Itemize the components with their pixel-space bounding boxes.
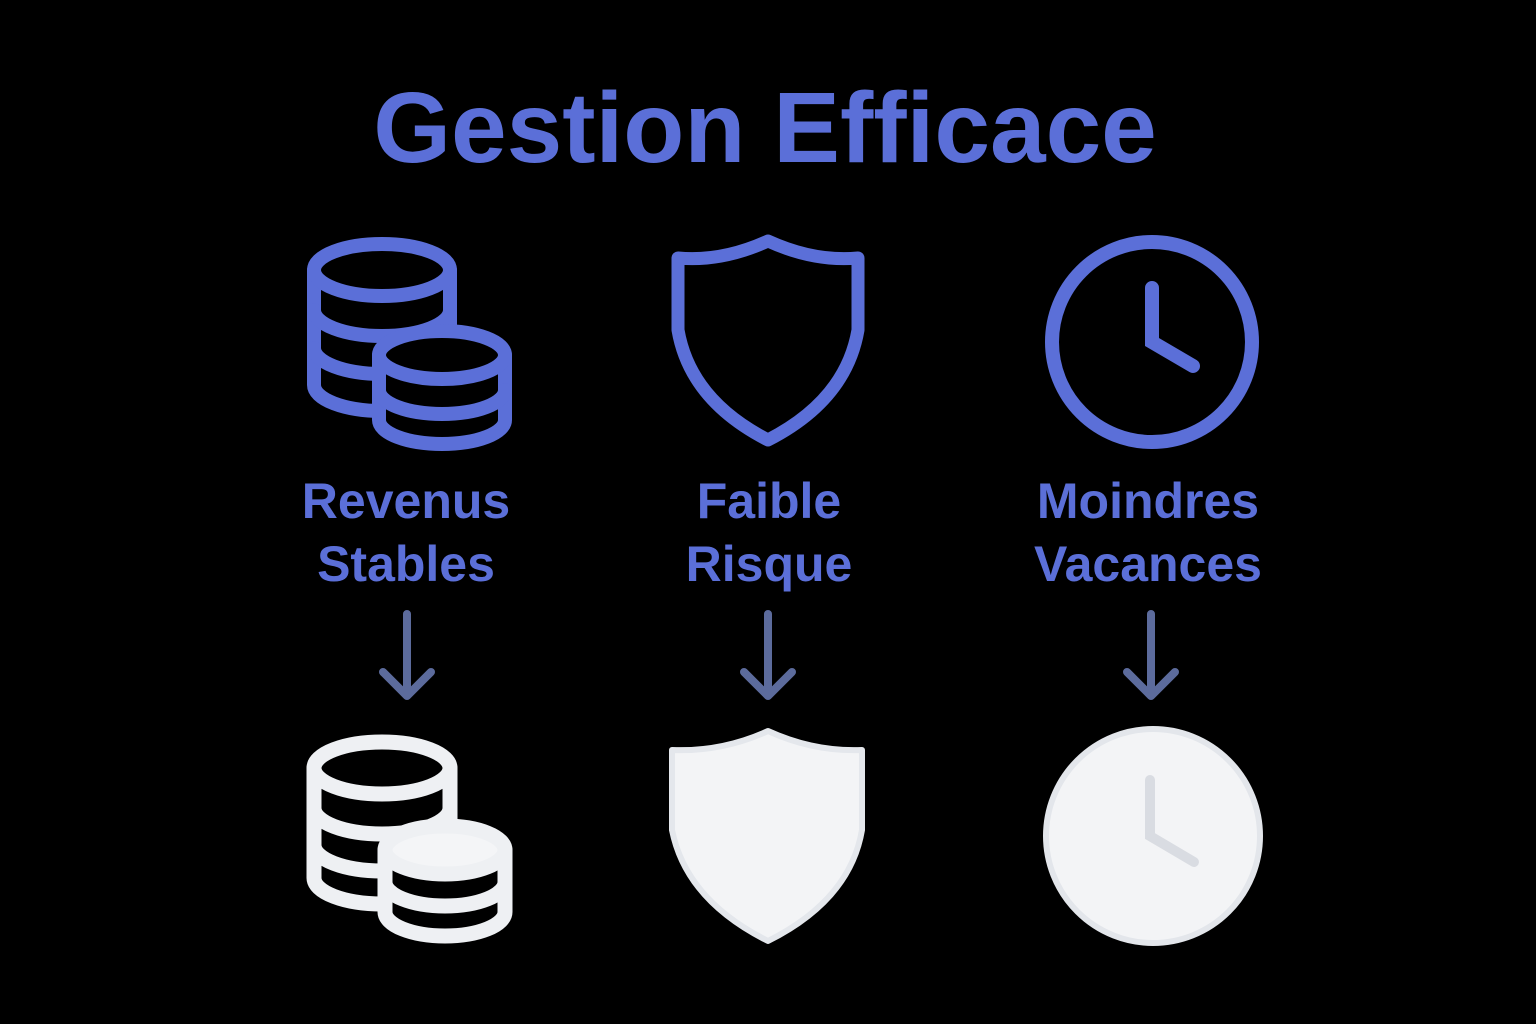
arrow 2 [744, 614, 792, 696]
icon: coins (white) [314, 742, 505, 936]
label: Moindres Vacances [1034, 473, 1262, 592]
label: Revenus Stables [302, 473, 510, 592]
icon: clock (blue) [1052, 242, 1252, 442]
label: Revenus Stables: Revenus [302, 473, 510, 529]
label: Moindres Vacances: Vacances [1034, 536, 1262, 592]
icon: coins (blue) [314, 244, 505, 444]
arrow 1 [383, 614, 431, 696]
icon: shield (blue) [678, 241, 858, 440]
label: Revenus Stables: Stables [317, 536, 495, 592]
label: Faible Risque [686, 473, 852, 592]
icon: clock (white) [1046, 729, 1260, 943]
arrow 3 [1127, 614, 1175, 696]
icon: shield (white) [672, 731, 862, 941]
title: Gestion Efficace [373, 72, 1157, 184]
label: Faible Risque: Faible [697, 473, 841, 529]
label: Moindres Vacances: Moindres [1037, 473, 1259, 529]
label: Faible Risque: Risque [686, 536, 852, 592]
